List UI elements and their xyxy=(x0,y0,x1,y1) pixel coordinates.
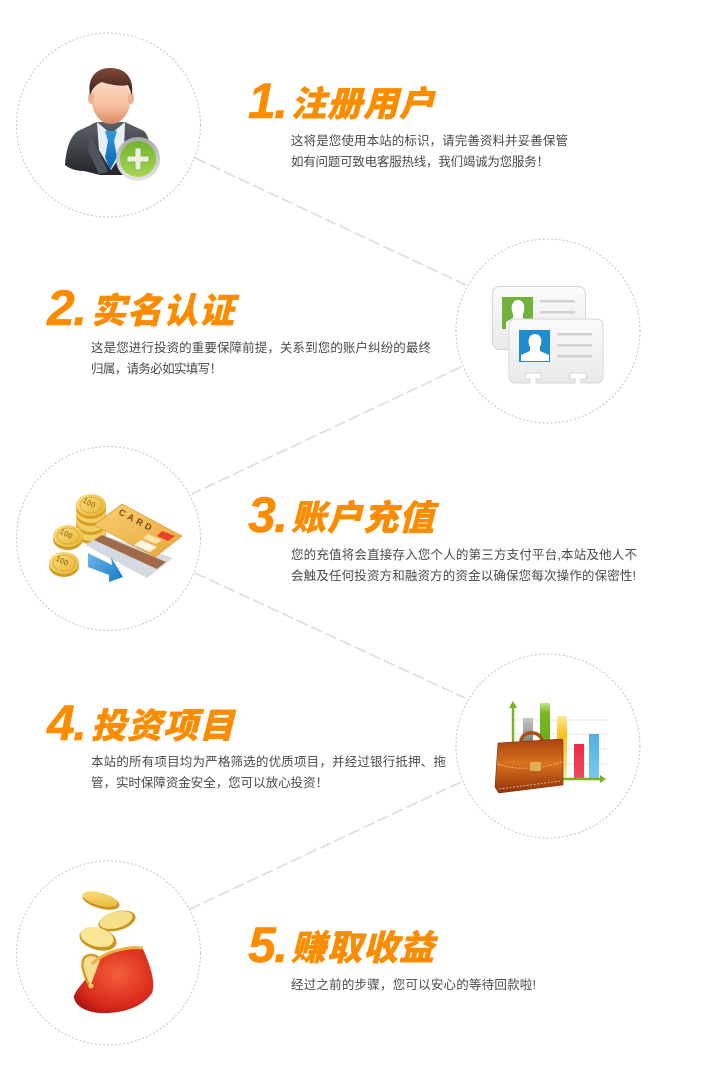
icon: id cards xyxy=(492,286,603,383)
description 2 xyxy=(91,340,431,376)
number 2: 2. xyxy=(46,280,87,336)
number 1: 1. xyxy=(248,73,288,129)
circle frame 2 xyxy=(456,239,640,423)
number 5: 5. xyxy=(248,917,288,973)
description 5: 经过之前的步骤，您可以安心的等待回款啦! xyxy=(291,977,536,992)
icon: coins and credit cards: 100 xyxy=(81,496,98,510)
step 1: register user xyxy=(16,33,568,217)
number 3: 3. xyxy=(248,487,288,543)
icon: coins and credit cards xyxy=(49,494,182,582)
circle frame 4 xyxy=(456,654,640,838)
icon: red purse with gold coins xyxy=(74,888,153,1013)
circle frame 3 xyxy=(16,446,200,630)
heading 1: 注册用户 xyxy=(291,85,436,124)
heading 4: 投资项目 xyxy=(91,707,237,746)
description 1: 这将是您使用本站的标识，请完善资料并妥善保管 xyxy=(291,133,568,148)
description 3 xyxy=(291,547,637,583)
description 4: 管，实时保障资金安全，您可以放心投资！ xyxy=(91,775,328,790)
number 4: 4. xyxy=(46,695,87,751)
description 2: 归属，请务必如实填写！ xyxy=(91,361,222,376)
step 4: invest in projects xyxy=(46,654,640,838)
heading 3: 账户充值 xyxy=(291,499,440,538)
step 2: real-name verification xyxy=(46,239,640,423)
connector lines xyxy=(190,158,466,909)
description 2: 这是您进行投资的重要保障前提，关系到您的账户纠纷的最终 xyxy=(91,340,431,355)
circle frame 1 xyxy=(16,33,200,217)
step 3: account top-up xyxy=(16,446,637,630)
icon: briefcase and bar chart xyxy=(495,701,607,793)
circle frame 5 xyxy=(16,861,200,1045)
heading 2: 实名认证 xyxy=(91,292,240,331)
heading 5: 赚取收益 xyxy=(291,929,439,968)
icon: coins and credit cards: CARD xyxy=(117,507,154,533)
description 3: 会触及任何投资方和融资方的资金以确保您每次操作的保密性! xyxy=(291,568,636,583)
description 3: 您的充值将会直接存入您个人的第三方支付平台,本站及他人不 xyxy=(291,547,637,562)
step 5: earn returns xyxy=(16,861,536,1045)
description 4: 本站的所有项目均为严格筛选的优质项目，并经过银行抵押、拖 xyxy=(91,754,446,769)
description 4 xyxy=(91,754,446,790)
description 1 xyxy=(291,133,568,169)
description 1: 如有问题可致电客服热线，我们竭诚为您服务！ xyxy=(291,154,549,169)
icon: businessman with plus badge xyxy=(65,68,160,181)
icon: coins and credit cards: 100 xyxy=(54,554,71,568)
icon: coins and credit cards: 100 xyxy=(58,527,75,541)
